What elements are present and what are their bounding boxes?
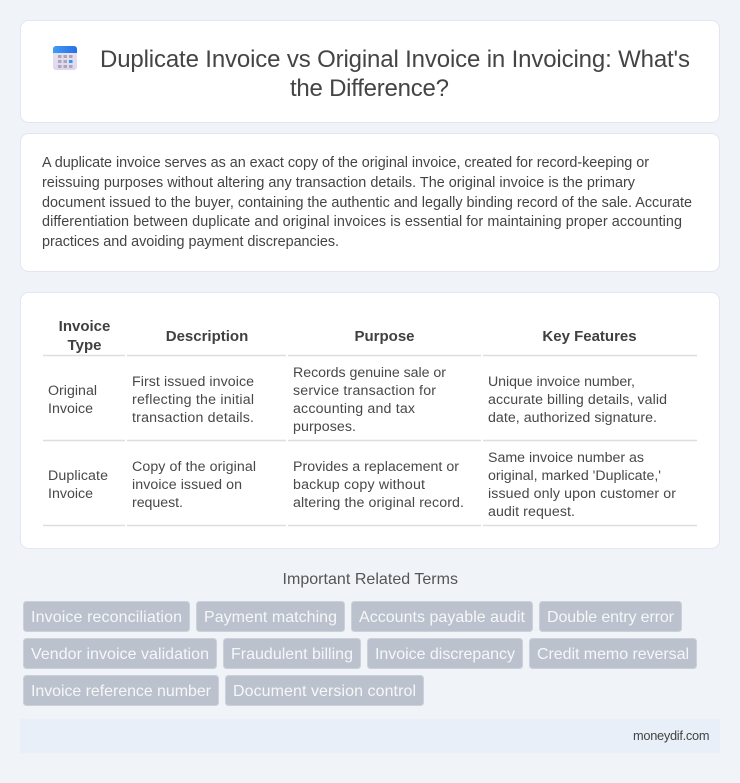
panel: comparison table xyxy=(20,292,720,548)
title: the Difference? xyxy=(290,75,449,102)
text block: introduction paragraph: practices and avoiding payment discrepancies. xyxy=(42,234,339,250)
table row: duplicate invoice: request. xyxy=(132,495,183,511)
heading: important related terms: Important Related Terms xyxy=(282,571,458,588)
table row: duplicate invoice xyxy=(48,450,676,520)
table row: duplicate invoice: original, marked 'Duplicate,' xyxy=(488,468,661,484)
table row: original invoice: date, authorized signature. xyxy=(488,410,657,426)
table row: original invoice: reflecting the initial xyxy=(132,392,254,408)
tag: vendor invoice validation xyxy=(24,638,216,668)
table row: duplicate invoice: invoice issued on xyxy=(132,477,242,493)
table row: duplicate invoice: backup copy without xyxy=(293,477,425,493)
table row: original invoice: Records genuine sale or xyxy=(293,365,446,381)
tag: invoice reconciliation xyxy=(24,602,190,632)
title xyxy=(100,46,690,102)
tag: invoice reference number: Invoice reference number xyxy=(31,683,212,700)
table row: original invoice: Original xyxy=(48,383,97,399)
table header row: Type xyxy=(68,337,101,354)
table row: original invoice: accurate billing details, valid xyxy=(488,392,667,408)
tag: document version control: Document version control xyxy=(233,683,416,700)
footer source text: moneydif.com xyxy=(633,728,710,743)
table header row: Purpose xyxy=(354,328,415,345)
table row: duplicate invoice: audit request. xyxy=(488,504,575,520)
tag: invoice reconciliation: Invoice reconciliation xyxy=(31,609,182,626)
table row: original invoice: Invoice xyxy=(48,401,93,417)
panel: header xyxy=(20,20,720,122)
tag: document version control xyxy=(226,676,424,706)
text block: introduction paragraph: reissuing purposes without altering any transaction details. The original invoice is the primary xyxy=(42,175,636,191)
tag: fraudulent billing: Fraudulent billing xyxy=(231,646,353,663)
tag: fraudulent billing xyxy=(224,638,360,668)
icon: calendar xyxy=(53,46,77,70)
tag: invoice discrepancy xyxy=(368,638,522,668)
table row: original invoice: purposes. xyxy=(293,419,356,435)
table row: duplicate invoice: Same invoice number as xyxy=(488,450,644,466)
tag: payment matching xyxy=(196,602,344,632)
table row: duplicate invoice: altering the original record. xyxy=(293,495,464,511)
table row: duplicate invoice: Provides a replacement or xyxy=(293,459,459,475)
table header row: Description xyxy=(166,328,248,345)
text block: introduction paragraph: document issued to the buyer, containing the authentic and legally binding record of the sale. Accurate xyxy=(42,195,692,211)
footer bar xyxy=(20,719,720,753)
table header row xyxy=(59,318,637,354)
table header row: Key Features xyxy=(542,328,637,345)
tag: invoice reference number xyxy=(24,676,218,706)
table row: duplicate invoice: Duplicate xyxy=(48,468,108,484)
table header row: Invoice xyxy=(59,318,110,335)
tag list: related terms xyxy=(24,602,696,706)
tag: double entry error xyxy=(540,602,682,632)
tag: invoice discrepancy: Invoice discrepancy xyxy=(375,646,515,663)
table row: duplicate invoice: Invoice xyxy=(48,486,93,502)
tag: double entry error: Double entry error xyxy=(547,609,675,626)
table row: original invoice: transaction details. xyxy=(132,410,254,426)
table row: original invoice: service transaction for xyxy=(293,383,436,399)
title: Duplicate Invoice vs Original Invoice in Invoicing: What's xyxy=(100,46,690,73)
tag: credit memo reversal: Credit memo reversal xyxy=(537,646,689,663)
table row: duplicate invoice: Copy of the original xyxy=(132,459,256,475)
table row: duplicate invoice: issued only upon customer or xyxy=(488,486,676,502)
text block: introduction paragraph xyxy=(42,155,692,250)
table row: original invoice: First issued invoice xyxy=(132,374,254,390)
table row: original invoice xyxy=(48,365,667,435)
text block: introduction paragraph: A duplicate invoice serves as an exact copy of the original invoice, created for record-keeping or xyxy=(42,155,649,171)
text block: introduction paragraph: differentiation between duplicate and original invoices is essential for maintaining proper accounting xyxy=(42,214,682,230)
table row: original invoice: Unique invoice number, xyxy=(488,374,635,390)
tag: payment matching: Payment matching xyxy=(204,609,337,626)
tag: credit memo reversal xyxy=(530,638,696,668)
tag: accounts payable audit xyxy=(352,602,532,632)
table row: original invoice: accounting and tax xyxy=(293,401,415,417)
panel: introduction xyxy=(20,134,720,272)
tag: accounts payable audit: Accounts payable audit xyxy=(359,609,526,626)
tag: vendor invoice validation: Vendor invoice validation xyxy=(31,646,209,663)
